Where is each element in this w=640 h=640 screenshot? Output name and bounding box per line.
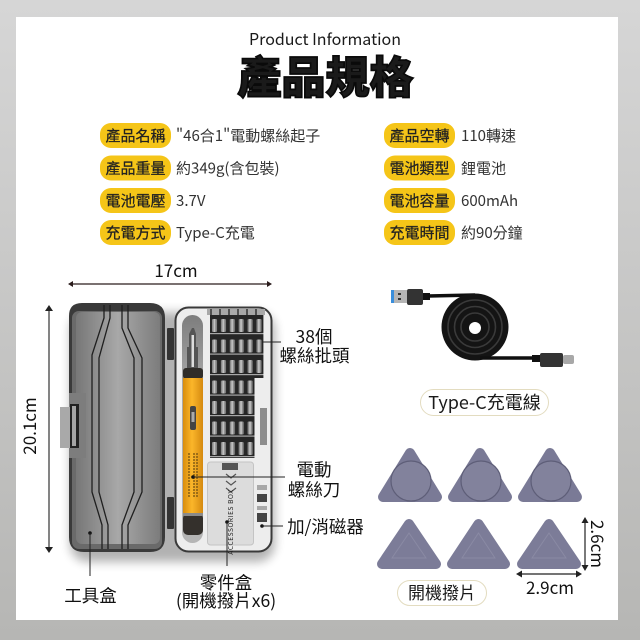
magnetizer slots bbox=[257, 485, 267, 522]
label: tool case bbox=[64, 531, 117, 608]
pill: Type-C cable: Type-C充電線 bbox=[428, 389, 541, 415]
dimension: 2.9cm bbox=[516, 570, 582, 599]
side strip bbox=[260, 408, 267, 445]
label: electric screwdriver: 螺絲刀 bbox=[288, 477, 340, 502]
spec: battery type: 電池類型 bbox=[389, 158, 450, 178]
spec: voltage bbox=[100, 188, 206, 213]
spec: charge time: 充電時間 bbox=[389, 222, 450, 243]
spec: battery type: 鋰電池 bbox=[461, 158, 506, 178]
spec: battery capacity bbox=[384, 188, 518, 213]
spec: charging method: Type-C充電 bbox=[176, 222, 255, 243]
clasp bbox=[69, 393, 86, 458]
product: tool case bbox=[60, 303, 275, 562]
spec: battery capacity: 電池容量 bbox=[389, 190, 450, 211]
subtitle: Product Information bbox=[249, 26, 401, 50]
spec: weight: 約349g(含包裝) bbox=[176, 158, 280, 178]
pry tool 5 bbox=[452, 524, 505, 564]
spec: product name bbox=[100, 123, 320, 148]
spec: weight bbox=[100, 156, 280, 180]
label: accessories box bbox=[176, 520, 276, 613]
label: 38 bits: 38個 bbox=[296, 324, 332, 349]
spec: battery type bbox=[384, 156, 506, 180]
spec: charging method bbox=[100, 220, 255, 245]
cable coil bbox=[428, 294, 535, 360]
spec: battery capacity: 600mAh bbox=[461, 190, 518, 211]
spec: idle speed bbox=[384, 123, 516, 148]
dimension: 2.6cm: 2.6cm bbox=[586, 520, 611, 568]
bit holder bbox=[207, 309, 265, 315]
dimension: 2.9cm: 2.9cm bbox=[526, 574, 574, 599]
product: top row pry tools bbox=[383, 453, 577, 501]
accessories box bbox=[208, 462, 254, 555]
spec: idle speed: 110轉速 bbox=[461, 125, 516, 146]
pry tool 2 bbox=[453, 453, 507, 501]
screwdriver slot bbox=[182, 315, 203, 543]
label: accessories box: (開機撥片x6) bbox=[176, 588, 276, 613]
width dimension: 17cm bbox=[68, 257, 272, 287]
spec table bbox=[100, 123, 523, 245]
label: degausser: 加/消磁器 bbox=[287, 514, 364, 539]
case shadow bbox=[70, 312, 275, 562]
spec: voltage: 3.7V bbox=[176, 190, 206, 211]
pry tool 4 bbox=[382, 524, 436, 564]
pry tool 1 bbox=[383, 453, 437, 501]
label: accessories box: 零件盒 bbox=[200, 570, 253, 595]
spec: charging method: 充電方式 bbox=[105, 222, 166, 243]
height dimension: 20.1cm: 20.1cm bbox=[16, 397, 41, 455]
label: electric screwdriver bbox=[191, 457, 340, 502]
product: bottom row pry tools bbox=[382, 524, 576, 564]
label: electric screwdriver: 電動 bbox=[296, 457, 332, 482]
accessories box: ACCESSORIES BOX bbox=[225, 489, 235, 555]
USB plug bbox=[391, 289, 430, 305]
electric screwdriver bbox=[183, 328, 203, 535]
label: 38 bits bbox=[262, 324, 350, 368]
product: Type-C cable bbox=[391, 289, 574, 367]
pry tool 6 bbox=[522, 524, 576, 564]
right tray bbox=[176, 308, 272, 555]
spec: charge time bbox=[384, 220, 523, 245]
spec: product name: "46合1"電動螺絲起子 bbox=[176, 125, 320, 146]
spec: voltage: 電池電壓 bbox=[105, 190, 166, 211]
label: 38 bits: 螺絲批頭 bbox=[280, 343, 350, 368]
hinges bbox=[167, 328, 174, 529]
spec: charge time: 約90分鐘 bbox=[461, 222, 523, 243]
title: 產品規格 bbox=[238, 42, 414, 106]
height dimension: 20.1cm bbox=[16, 305, 53, 553]
spec: weight: 產品重量 bbox=[105, 158, 166, 178]
pry tool 3 bbox=[523, 453, 577, 501]
width dimension: 17cm: 17cm bbox=[154, 257, 198, 282]
spec: product name: 產品名稱 bbox=[105, 125, 166, 146]
spec: idle speed: 產品空轉 bbox=[389, 125, 450, 146]
USB-C plug bbox=[532, 353, 574, 367]
pill: pry tools: 開機撥片 bbox=[408, 579, 476, 604]
left lid bbox=[60, 303, 165, 552]
label: tool case: 工具盒 bbox=[64, 583, 117, 608]
